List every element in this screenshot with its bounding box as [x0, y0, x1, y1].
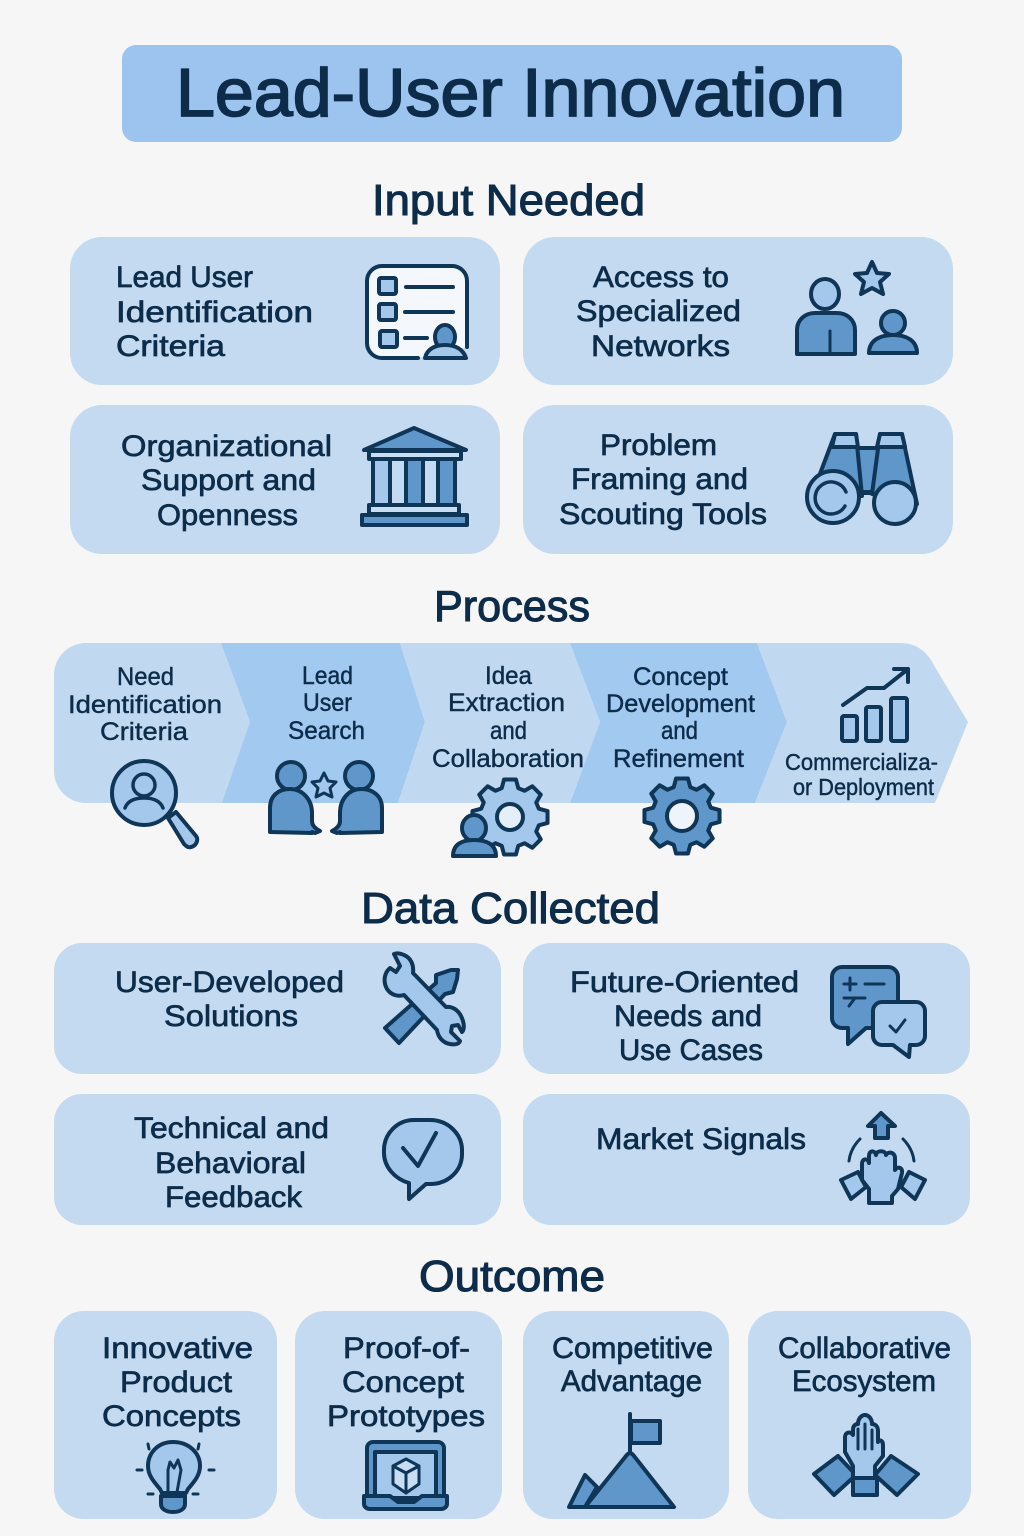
chevron: Concept Development and Refinement: Development	[606, 690, 755, 718]
panel: User-Developed Solutions	[54, 943, 501, 1074]
panel: User-Developed Solutions: Solutions	[164, 1000, 298, 1033]
panel: Future-Oriented Needs and Use Cases	[523, 943, 970, 1074]
chevron: Commercialization or Deployment	[755, 643, 968, 803]
panel: Organizational Support and Openness: Organizational	[121, 430, 332, 463]
icon: two users with star	[270, 762, 382, 833]
panel: Proof-of-Concept Prototypes: Concept	[342, 1366, 465, 1399]
panel: Proof-of-Concept Prototypes	[295, 1311, 502, 1519]
panel: Problem Framing and Scouting Tools: Problem	[600, 429, 717, 462]
chevron: Need Identification Criteria: Identification	[68, 691, 222, 719]
title: Lead-User Innovation	[176, 55, 845, 131]
chevron: Lead User Search	[221, 643, 425, 803]
panel: Proof-of-Concept Prototypes: Proof-of-	[343, 1332, 470, 1365]
icon: gear	[644, 778, 720, 854]
chevron: Need Identification Criteria: Criteria	[100, 718, 188, 746]
panel: Access to Specialized Networks: Networks	[591, 330, 730, 363]
heading: Outcome: Outcome	[419, 1252, 605, 1301]
panel: Technical and Behavioral Feedback	[54, 1094, 501, 1225]
icon: growth bar chart	[842, 669, 908, 741]
chevron: Need Identification Criteria: Need	[117, 663, 174, 691]
panel: Future-Oriented Needs and Use Cases: Future-Oriented	[570, 966, 799, 999]
chevron: Lead User Search: Search	[288, 717, 365, 745]
chevron: Concept Development and Refinement	[570, 643, 787, 803]
panel: User-Developed Solutions: User-Developed	[115, 966, 344, 999]
chevron: Concept Development and Refinement: Refinement	[613, 745, 744, 773]
panel: Organizational Support and Openness: Support and	[141, 464, 316, 497]
panel: Market Signals: Market Signals	[596, 1123, 806, 1156]
panel: Access to Specialized Networks: Access to	[593, 261, 729, 294]
title	[122, 45, 902, 142]
icon: mountain with flag	[569, 1414, 674, 1507]
panel: Market Signals	[523, 1094, 970, 1225]
panel: Technical and Behavioral Feedback: Technical and	[134, 1112, 329, 1145]
chevron: Idea Extraction and Collaboration	[398, 643, 600, 803]
icon: binoculars	[807, 434, 917, 524]
icon: wrench and screwdriver	[385, 953, 464, 1044]
panel: Future-Oriented Needs and Use Cases: Needs and	[614, 1000, 762, 1033]
chevron: Lead User Search: User	[303, 689, 352, 717]
panel: Lead User Identification Criteria: Criteria	[116, 330, 225, 363]
panel: Access to Specialized Networks	[523, 237, 953, 385]
panel: Innovative Product Concepts: Product	[120, 1366, 233, 1399]
panel: Problem Framing and Scouting Tools: Scouting Tools	[559, 498, 767, 531]
panel: Innovative Product Concepts: Innovative	[102, 1332, 253, 1365]
panel: Competitive Advantage	[523, 1311, 729, 1519]
chart: process chevrons	[54, 643, 968, 856]
panel: Competitive Advantage: Competitive	[552, 1332, 713, 1365]
panel: Access to Specialized Networks: Specialized	[576, 295, 741, 328]
heading: Process: Process	[434, 582, 590, 631]
chevron: Concept Development and Refinement: Concept	[633, 663, 728, 691]
chevron: Concept Development and Refinement: and	[661, 717, 698, 745]
panel: Collaborative Ecosystem: Collaborative	[778, 1332, 951, 1365]
heading: Input Needed: Input Needed	[372, 176, 645, 225]
panel: Collaborative Ecosystem	[748, 1311, 971, 1519]
chevron: Idea Extraction and Collaboration: Extraction	[448, 689, 565, 717]
icon: speech bubble with check	[384, 1120, 462, 1199]
panel: Technical and Behavioral Feedback: Feedback	[165, 1181, 303, 1214]
panel: Competitive Advantage: Advantage	[561, 1365, 702, 1398]
panel: Problem Framing and Scouting Tools: Framing and	[571, 463, 748, 496]
chevron: Lead User Search: Lead	[302, 662, 353, 690]
icon: magnifier with person	[112, 761, 197, 847]
chevron: Commercialization or Deployment: Commercializa-	[785, 749, 938, 775]
panel: Problem Framing and Scouting Tools	[523, 405, 953, 554]
panel: Lead User Identification Criteria: Identification	[116, 296, 313, 329]
icon: hand with arrow	[841, 1113, 925, 1203]
panel: Innovative Product Concepts: Concepts	[102, 1400, 241, 1433]
icon: chat bubbles	[832, 967, 925, 1057]
icon: checklist with person	[367, 266, 467, 358]
panel: Organizational Support and Openness: Openness	[157, 499, 298, 532]
panel: Lead User Identification Criteria	[70, 237, 500, 385]
icon: light bulb	[137, 1442, 214, 1512]
icon: institution building	[362, 428, 467, 525]
panel: Lead User Identification Criteria: Lead User	[116, 261, 253, 294]
panel: Proof-of-Concept Prototypes: Prototypes	[327, 1400, 485, 1433]
panel: Organizational Support and Openness	[70, 405, 500, 554]
chevron: Idea Extraction and Collaboration: and	[490, 717, 527, 745]
icon: laptop with cube	[364, 1442, 447, 1509]
panel: Innovative Product Concepts	[54, 1311, 277, 1519]
icon: person with gear	[453, 779, 548, 856]
heading: Data Collected: Data Collected	[361, 884, 660, 933]
icon: two people and star	[797, 262, 917, 354]
chevron: Need Identification Criteria	[54, 643, 250, 803]
chevron: Idea Extraction and Collaboration: Collaboration	[432, 745, 584, 773]
panel: Technical and Behavioral Feedback: Behavioral	[155, 1147, 306, 1180]
panel: Future-Oriented Needs and Use Cases: Use Cases	[619, 1034, 763, 1067]
panel: Collaborative Ecosystem: Ecosystem	[792, 1365, 936, 1398]
chevron: Commercialization or Deployment: or Deployment	[793, 774, 935, 800]
icon: joined hands	[814, 1415, 918, 1495]
chevron: Idea Extraction and Collaboration: Idea	[485, 662, 532, 690]
